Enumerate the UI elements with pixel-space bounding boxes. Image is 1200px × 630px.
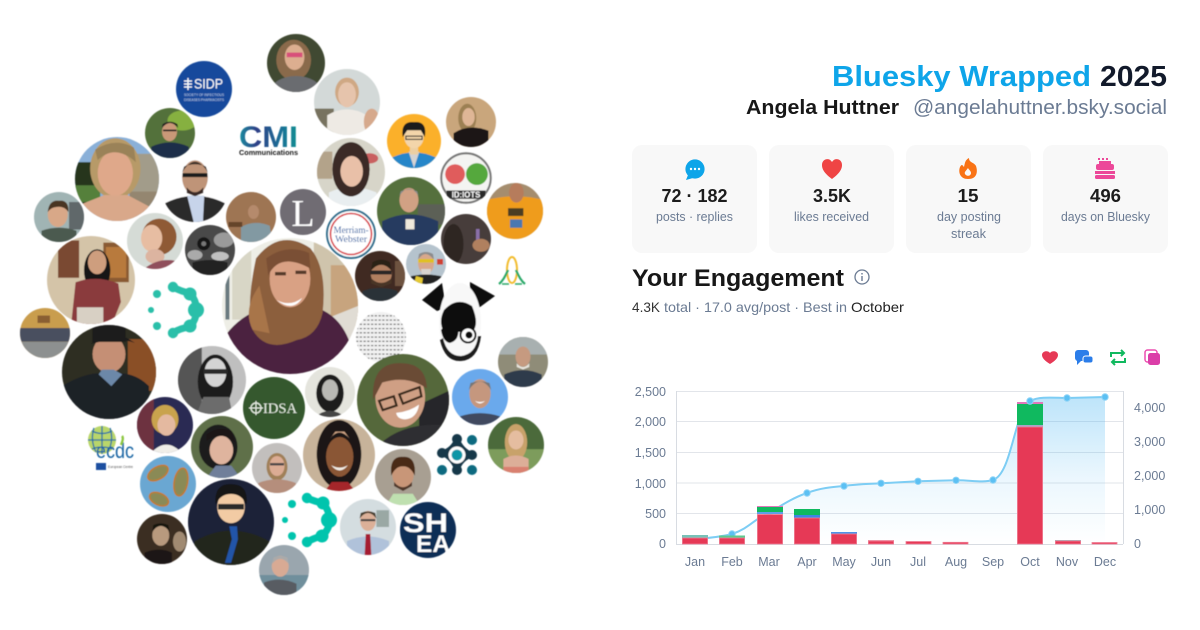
month labels: Aug bbox=[945, 555, 967, 569]
avatar: man with glasses in suit bbox=[164, 160, 226, 223]
avatar: woman black and white portrait bbox=[305, 367, 355, 417]
logo: triangle S emblem bbox=[499, 257, 525, 284]
avatar: cartoon man on orange bbox=[387, 114, 441, 168]
avatar: black and white cartoon character bbox=[422, 282, 495, 361]
line points bbox=[692, 394, 1108, 542]
avatar: grey haired man bbox=[259, 545, 309, 595]
avatar: main profile woman bbox=[222, 238, 358, 374]
avatar bubble cluster bbox=[20, 34, 548, 595]
avatar: Merriam-Webster logo bbox=[326, 209, 376, 259]
avatar: blonde woman outdoors bbox=[488, 417, 544, 473]
left axis labels: 500 bbox=[645, 507, 666, 521]
logo: ECDC: European Centre bbox=[108, 465, 133, 469]
title: Bluesky Wrapped 2025: 2025 bbox=[1100, 61, 1167, 93]
avatar: IDSA logo bbox=[243, 377, 305, 439]
left axis labels: 1,500 bbox=[635, 446, 666, 460]
icon: quotes legend squares bbox=[1145, 350, 1160, 365]
stat card: posts and replies: posts · replies bbox=[656, 210, 733, 224]
cumulative line bbox=[695, 397, 1105, 539]
left axis labels: 2,500 bbox=[635, 385, 666, 399]
title: Bluesky Wrapped 2025: Bluesky Wrapped bbox=[832, 61, 1091, 93]
stat card: day posting streak: day posting bbox=[937, 210, 1001, 224]
logo: ECDC bbox=[88, 426, 134, 470]
stat card: posts and replies: 72 · 182 bbox=[662, 186, 728, 206]
avatar: runner in orange bbox=[487, 183, 543, 239]
avatar: woman with braids bbox=[303, 419, 375, 491]
avatar: Merriam-Webster logo: Merriam- bbox=[334, 226, 368, 236]
right axis labels: 2,000 bbox=[1134, 469, 1165, 483]
avatar: laughing man with glasses bbox=[357, 354, 449, 446]
month labels: Jun bbox=[871, 555, 891, 569]
logo: mint dotted ring bbox=[282, 493, 337, 547]
avatar: woman with pink sunglasses bbox=[266, 33, 326, 93]
icon: cake bbox=[1095, 158, 1115, 179]
stat card: days on Bluesky bbox=[1043, 145, 1168, 253]
avatar: man in dark hoodie bbox=[34, 192, 84, 242]
avatar: SIDP logo: SIDP bbox=[194, 76, 223, 92]
logo: ECDC: ecdc bbox=[96, 440, 134, 463]
avatar: SHEA logo: EA bbox=[416, 531, 450, 558]
icon: reposts legend arrows bbox=[1111, 350, 1125, 365]
month labels: Dec bbox=[1094, 555, 1116, 569]
stat card: day posting streak: 15 bbox=[958, 186, 978, 206]
avatar: woman resting chin on hand bbox=[127, 213, 183, 269]
month labels: Jan bbox=[685, 555, 705, 569]
engagement summary line: total · 17.0 avg/post · Best in bbox=[664, 299, 847, 315]
avatar: SIDP logo: DISEASES PHARMACISTS bbox=[184, 97, 224, 102]
icon: replies legend bubbles bbox=[1075, 350, 1093, 365]
logo: teal dotted ring bbox=[148, 282, 204, 338]
avatar: woman with glasses bbox=[252, 443, 302, 493]
stat card: likes received bbox=[769, 145, 894, 253]
October line point bbox=[1027, 398, 1033, 404]
engagement summary line bbox=[632, 299, 904, 315]
avatar: SHEA logo: SH bbox=[403, 508, 448, 538]
avatar: man with glasses and beard bbox=[355, 251, 405, 301]
icon: likes legend heart bbox=[1042, 351, 1058, 364]
logo: CMI Communications: Communications bbox=[239, 148, 298, 157]
left axis labels: 2,000 bbox=[635, 415, 666, 429]
month labels: Mar bbox=[758, 555, 780, 569]
avatar: woman with bob haircut bbox=[75, 137, 159, 221]
icon: speech bubble bbox=[685, 159, 705, 180]
avatar: photographer black and white bbox=[185, 225, 235, 275]
stat card: likes received: 3.5K bbox=[813, 186, 851, 206]
avatar: L logo: L bbox=[291, 193, 315, 235]
engagement summary line: 4.3K bbox=[632, 299, 661, 315]
right axis labels: 0 bbox=[1134, 537, 1141, 551]
left axis labels: 0 bbox=[659, 537, 666, 551]
avatar: man on blue background bbox=[452, 369, 508, 425]
avatar: Merriam-Webster logo: Webster bbox=[335, 235, 368, 245]
avatar: Asian woman long dark hair bbox=[317, 138, 385, 206]
avatar: woman in floral dress bbox=[47, 236, 135, 324]
month labels bbox=[685, 555, 1116, 569]
right axis labels: 3,000 bbox=[1134, 435, 1165, 449]
month labels: Apr bbox=[797, 555, 817, 569]
stat card: posts and replies bbox=[632, 145, 757, 253]
avatar: L logo bbox=[280, 189, 326, 235]
month labels: Sep bbox=[982, 555, 1004, 569]
bars: replies, reposts, quotes bbox=[682, 402, 1081, 541]
avatar: IDSA logo: IDSA bbox=[263, 401, 297, 417]
stat card: day posting streak bbox=[906, 145, 1031, 253]
profile name and handle bbox=[746, 97, 1167, 119]
stat card: day posting streak: streak bbox=[951, 227, 987, 241]
avatar: SHEA logo bbox=[400, 502, 456, 558]
avatar: SIDP logo: SOCIETY OF INFECTIOUS bbox=[184, 92, 224, 97]
engagement summary line: October bbox=[851, 299, 904, 315]
avatar: globe with islands bbox=[140, 456, 196, 512]
avatar: blonde woman in white top bbox=[314, 69, 380, 135]
avatar: woman with blond bouffant bbox=[137, 397, 193, 453]
avatar: man with red tie bbox=[340, 499, 396, 555]
month labels: Feb bbox=[721, 555, 743, 569]
profile name and handle: @angelahuttner.bsky.social bbox=[913, 97, 1167, 119]
stat card: days on Bluesky: days on Bluesky bbox=[1061, 210, 1151, 224]
left axis labels bbox=[635, 385, 666, 551]
profile name and handle: Angela Huttner bbox=[746, 97, 899, 119]
avatar: man in greenery bbox=[145, 108, 198, 158]
left axis labels: 1,000 bbox=[635, 477, 666, 491]
avatar: Asian woman with dark hair bbox=[191, 416, 253, 478]
chart: monthly engagement bars and cumulative line bbox=[635, 385, 1165, 569]
chart legend icons bbox=[1042, 350, 1160, 365]
right axis labels: 4,000 bbox=[1134, 401, 1165, 415]
avatar: man in grey shirt against rock bbox=[226, 192, 276, 242]
avatar: man with grey hair on mountain bbox=[498, 337, 548, 387]
area under cumulative line bbox=[695, 397, 1105, 544]
avatar: bearded man bbox=[375, 449, 431, 505]
icon: info bbox=[855, 270, 869, 284]
logo: dark blue network mark bbox=[437, 434, 477, 475]
month labels: Oct bbox=[1020, 555, 1040, 569]
icon: heart bbox=[822, 159, 842, 179]
bars: likes bbox=[682, 427, 1117, 544]
avatar: SIDP logo bbox=[176, 61, 232, 117]
avatar: covid ID:IOTS logo: ID:IOTS bbox=[452, 190, 480, 199]
avatar: blonde woman in black bbox=[446, 97, 496, 147]
heading: Your Engagement: Your Engagement bbox=[632, 265, 844, 292]
avatar: illustrated man with blue tie bbox=[188, 479, 274, 565]
avatar: hand holding vial bbox=[441, 214, 491, 264]
avatar: woman black and white with glasses bbox=[178, 346, 246, 414]
avatar: covid ID:IOTS logo bbox=[440, 152, 492, 204]
right axis labels bbox=[1134, 401, 1165, 551]
logo: CMI Communications: CMI bbox=[239, 121, 298, 154]
avatar: sepia man portrait bbox=[137, 514, 187, 564]
avatar: newspaper text circle bbox=[356, 312, 406, 362]
stat card: days on Bluesky: 496 bbox=[1090, 186, 1121, 206]
month labels: Jul bbox=[910, 555, 926, 569]
avatar: man in yellow sunglasses bbox=[406, 244, 446, 284]
avatar: smiling man with cap bbox=[62, 325, 156, 419]
stat card: likes received: likes received bbox=[794, 210, 869, 224]
month labels: May bbox=[832, 555, 857, 569]
right axis labels: 1,000 bbox=[1134, 503, 1165, 517]
avatar: group photo bbox=[20, 308, 70, 358]
avatar: man in navy plaid shirt bbox=[377, 177, 445, 245]
icon: flame bbox=[959, 158, 977, 179]
month labels: Nov bbox=[1056, 555, 1079, 569]
